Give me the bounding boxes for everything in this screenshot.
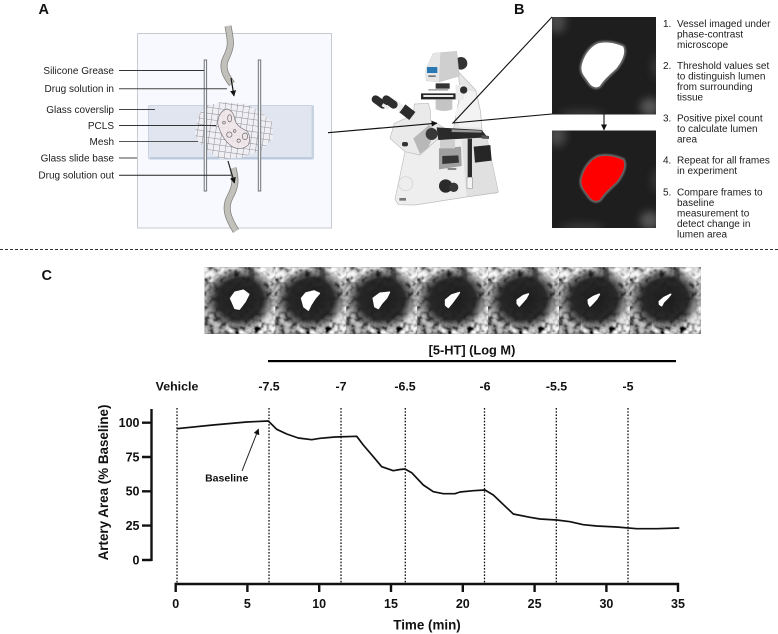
label: mesh: Mesh <box>90 137 114 148</box>
y tick labels: 75 <box>126 450 140 464</box>
callout: baseline: Baseline <box>205 472 248 484</box>
concentration labels: -7 <box>335 380 347 394</box>
image: phase-contrast vessel <box>548 11 660 118</box>
image strip: vessel frames over time <box>198 265 703 334</box>
frame 2 <box>269 265 348 334</box>
data line <box>177 421 679 529</box>
label: glass coverslip <box>46 105 155 116</box>
step 3: Positive pixel count <box>677 114 763 124</box>
x tick labels: 5 <box>244 597 251 611</box>
step 1: 1. <box>663 19 671 30</box>
panel letter C: C <box>42 268 52 284</box>
x tick labels: 35 <box>671 597 685 611</box>
step 5: 5. <box>663 188 671 198</box>
label: silicone grease: Silicone Grease <box>43 66 114 77</box>
step 1: microscope <box>677 40 729 51</box>
step 2: 2. <box>663 61 671 72</box>
x tick labels: 0 <box>172 597 179 611</box>
x tick labels: 30 <box>599 597 613 611</box>
arrow: threshold step <box>603 114 605 130</box>
x tick labels <box>172 597 685 611</box>
step 5: Compare frames to <box>677 188 763 198</box>
step 5: lumen area <box>677 230 727 240</box>
frame 4 <box>411 265 490 334</box>
tube: drug solution in <box>224 26 234 96</box>
tube: drug solution out <box>227 161 236 231</box>
glass coverslip <box>148 106 314 159</box>
y axis title: Artery Area (% Baseline) <box>96 405 111 560</box>
silicone grease strip left <box>204 60 207 191</box>
image: thresholded vessel in red <box>548 124 660 232</box>
lumen shapes shrinking across frames <box>231 290 671 310</box>
y tick labels: 0 <box>133 554 140 568</box>
frame 1 <box>198 265 278 334</box>
panel A: slide assembly diagram <box>138 26 332 231</box>
icon: inverted microscope <box>376 51 498 205</box>
step 5: detect change in <box>677 219 750 230</box>
line chart: artery area over time <box>96 405 685 632</box>
y tick labels <box>119 416 140 568</box>
label: glass coverslip: Glass coverslip <box>46 105 114 116</box>
concentration labels: -5 <box>622 380 634 394</box>
frame 7 <box>624 265 703 334</box>
callout: baseline <box>205 429 258 484</box>
x axis <box>176 584 678 592</box>
step 4: 4. <box>663 156 671 166</box>
dotted concentration markers <box>177 408 628 584</box>
heading: [5-HT] (Log M): [5-HT] (Log M) <box>429 342 515 358</box>
x axis title: Time (min) <box>393 618 461 632</box>
silicone grease strip right <box>258 60 261 191</box>
step 2: from surrounding <box>677 82 753 93</box>
step 4: in experiment <box>677 166 737 177</box>
y tick labels: 25 <box>126 519 140 533</box>
step 3: to calculate lumen <box>677 124 758 135</box>
label: PCLS: PCLS <box>88 121 114 132</box>
mesh <box>195 102 273 159</box>
callout labels for slide diagram <box>38 66 231 182</box>
x tick labels: 25 <box>528 597 542 611</box>
label: glass slide base: Glass slide base <box>41 154 114 164</box>
y tick labels: 50 <box>126 484 140 498</box>
step 4: Repeat for all frames <box>677 156 770 166</box>
x tick labels: 10 <box>312 597 326 611</box>
concentration labels: -5.5 <box>546 380 567 394</box>
x tick labels: 15 <box>384 597 398 611</box>
y axis <box>142 409 152 561</box>
frame 3 <box>340 265 419 334</box>
label: drug solution in: Drug solution in <box>45 84 114 95</box>
step 3: area <box>677 134 697 146</box>
label: mesh <box>90 137 198 148</box>
step 1: phase-contrast <box>677 30 743 40</box>
frame 6 <box>553 265 632 334</box>
panel letter A: A <box>38 2 50 18</box>
step 3: 3. <box>663 114 671 124</box>
concentration labels: -7.5 <box>258 380 280 394</box>
arrow: slide to microscope <box>328 123 437 133</box>
concentration labels <box>156 380 634 394</box>
step 5: baseline <box>677 198 715 209</box>
step 2: tissue <box>677 92 704 104</box>
x tick labels: 20 <box>456 597 470 611</box>
y tick labels: 100 <box>119 416 140 430</box>
PCLS tissue <box>218 109 250 149</box>
step 2: to distinguish lumen <box>677 72 765 82</box>
zoom lines to vessel image <box>453 17 552 123</box>
numbered analysis steps <box>663 19 771 240</box>
concentration bar <box>268 360 676 362</box>
concentration labels: -6.5 <box>394 380 416 394</box>
label: drug solution out: Drug solution out <box>38 170 114 182</box>
concentration labels: -6 <box>479 380 491 394</box>
step 2: Threshold values set <box>677 61 769 72</box>
frame 5 <box>482 265 561 334</box>
glass slide base <box>138 34 332 228</box>
label: PCLS <box>88 121 216 132</box>
panel letter B: B <box>514 2 524 18</box>
concentration labels: Vehicle <box>156 380 198 394</box>
step 5: measurement to <box>677 208 750 220</box>
step 1: Vessel imaged under <box>677 19 771 30</box>
